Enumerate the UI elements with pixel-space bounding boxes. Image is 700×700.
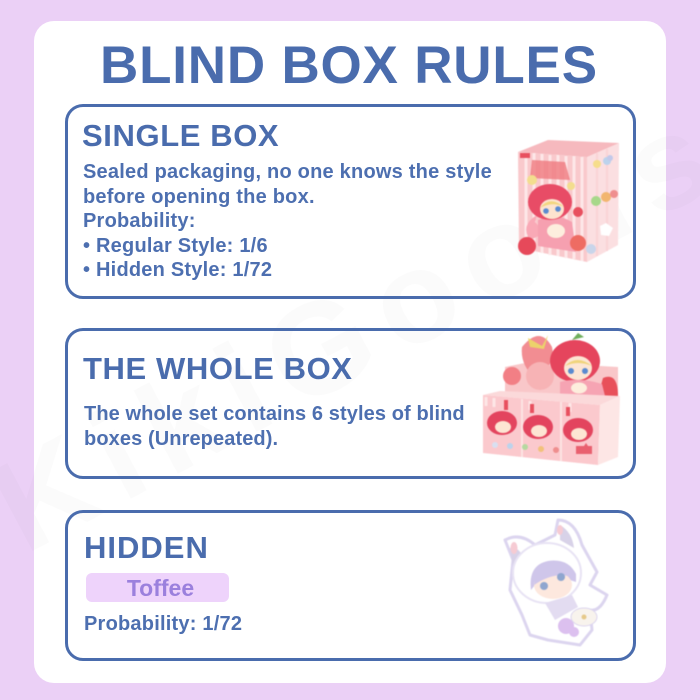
label: toffee: Toffee <box>127 575 194 601</box>
text: single box description: Probability: <box>83 210 196 232</box>
text: single box description: • Hidden Style: 1/72 <box>83 259 272 281</box>
text: single box description: before opening the box. <box>83 186 315 208</box>
title: BLIND BOX RULES <box>100 36 598 95</box>
text: single box description <box>83 161 492 281</box>
icon: display box <box>482 332 620 466</box>
text: whole box description <box>84 403 465 450</box>
heading: whole box: THE WHOLE BOX <box>83 351 353 386</box>
text: hidden probability: Probability: 1/72 <box>84 613 242 635</box>
text: single box description: Sealed packaging, no one knows the style <box>83 161 492 183</box>
heading: single box: SINGLE BOX <box>82 118 279 153</box>
heading: hidden: HIDDEN <box>84 530 209 565</box>
panel: whole box <box>65 328 636 479</box>
label: toffee <box>86 573 229 602</box>
text: single box description: • Regular Style: 1/6 <box>83 234 268 256</box>
icon: hidden figure <box>503 518 609 647</box>
icon: single blind box <box>517 140 620 262</box>
panel: hidden <box>65 510 636 661</box>
text: whole box description: The whole set contains 6 styles of blind <box>84 403 465 425</box>
panel: single box <box>65 104 636 299</box>
text: whole box description: boxes (Unrepeated). <box>84 428 278 450</box>
